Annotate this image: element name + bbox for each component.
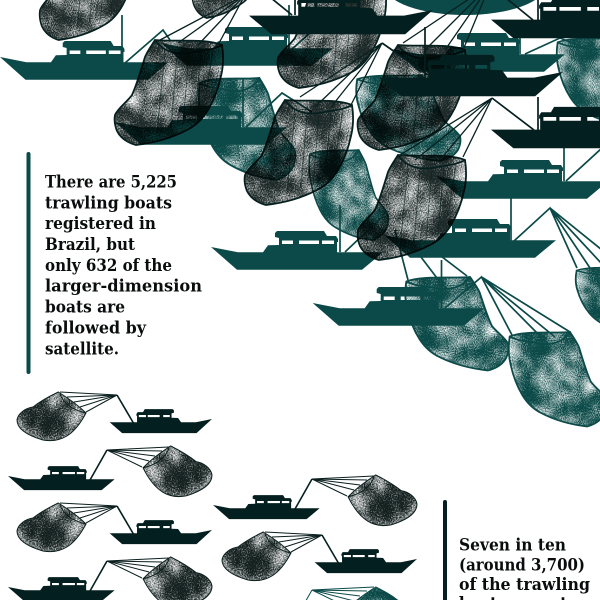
dark boat: top right [490,0,600,38]
teal boat: centre right [384,198,600,268]
text block: seven in ten [443,500,590,600]
small unit: row 4 left [8,557,212,600]
dark trawling boats with cables [160,0,600,160]
teal fishing nets, background layer [199,0,600,426]
teal net: top cut off [385,0,545,15]
small unit: row 1 left [17,392,212,441]
dark textured nets, multiply layer [40,0,466,260]
dark net: left large [115,40,223,145]
accent bar [26,152,30,374]
teal boat: top left [0,15,170,80]
dark net: top left [40,0,136,40]
dark boat: centre right [379,27,563,96]
small unit: row 1 right [213,475,417,526]
small boats and nets grid [8,392,417,600]
accent bar [443,500,447,600]
dark boat: right [491,97,600,148]
teal boat: behind top left net [161,5,333,66]
teal boat: centre left [115,78,312,145]
teal boat: lower centre [313,230,570,338]
registered boats text: Brazil, but [45,235,135,254]
teal boat: upper right [393,30,590,72]
registered boats text: There are 5,225 [45,173,177,192]
small unit: row 3 left [17,503,212,552]
teal trawling boats with masts and cables [0,5,600,338]
dark net: upper right of centre [358,45,466,150]
registered boats text: only 632 of the [45,256,172,275]
small unit: row 2 right [222,532,417,581]
seven in ten text: (around 3,700) [459,555,585,574]
registered boats text: satellite. [45,339,119,358]
dark boat: top centre [249,0,433,34]
teal net: behind upper centre net [356,75,460,161]
teal boat: centre [211,205,383,270]
dark net: top centre [192,0,268,18]
seven in ten text: of the trawling [459,575,590,594]
registered boats text: followed by [45,318,146,337]
teal boat: right [436,148,600,199]
teal net: centre [309,150,388,240]
cables to dark nets [160,0,492,160]
small teal net at bottom [295,587,417,600]
teal net: lower centre [405,277,508,370]
dark net: centre [245,100,353,205]
dark net: lower centre [358,155,466,260]
teal net: lower right [509,332,600,426]
seven in ten text: Seven in ten [459,536,566,555]
small unit: row 2 left [8,446,212,497]
registered boats text: registered in [45,214,156,233]
registered boats text: boats are [45,298,125,317]
teal net: centre left [199,78,295,180]
dark net: top middle [278,0,386,88]
registered boats text [45,173,202,358]
teal net: upper right edge [557,38,600,127]
text block: boats registered [26,152,202,374]
registered boats text: trawling boats [45,193,172,212]
registered boats text: larger-dimension [45,277,202,296]
teal net: right edge [576,267,600,336]
seven in ten text [459,536,590,600]
